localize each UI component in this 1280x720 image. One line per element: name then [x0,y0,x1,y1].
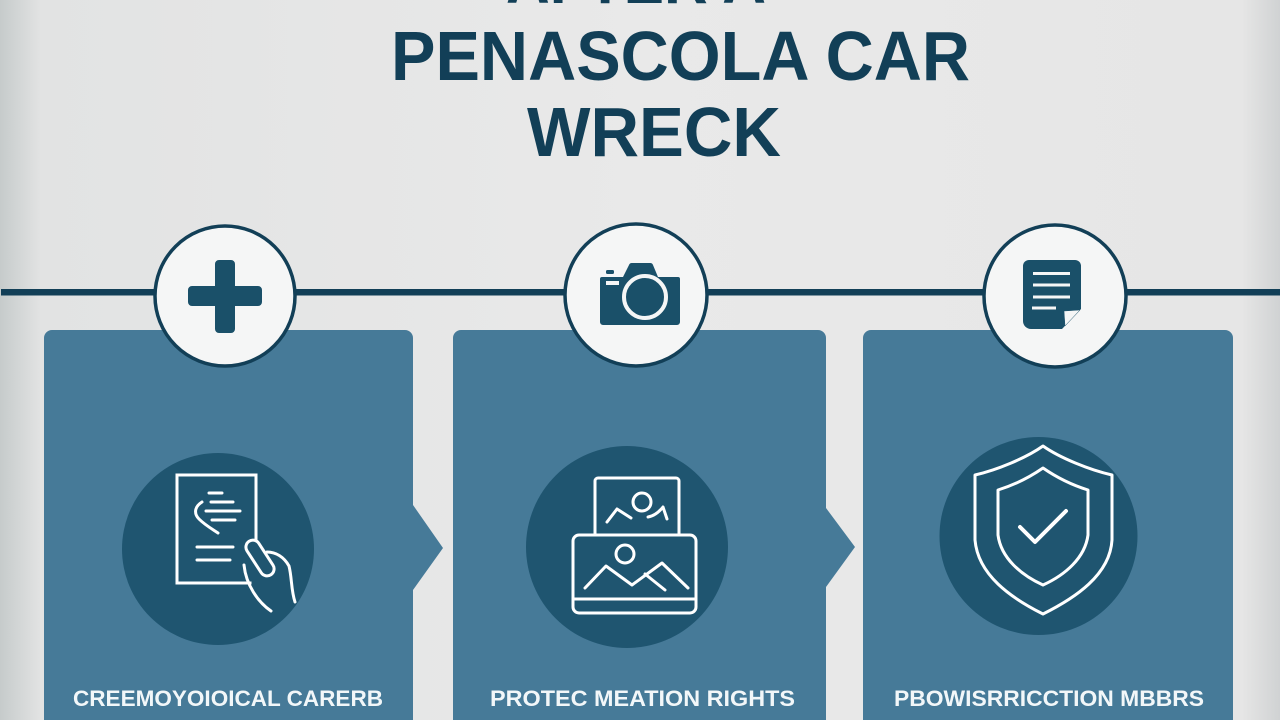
title [391,0,970,171]
panel: step 1 [44,330,443,720]
panel background with arrow [453,330,855,720]
icon: document in hand [122,453,314,645]
icon: medical cross badge [155,226,295,366]
panel label: PBOWISRRICCTION MBBRS [894,686,1204,711]
panel background [863,330,1233,720]
panel label: CREEMOYOIOICAL CARERB [73,686,383,711]
panel background with arrow [44,330,443,720]
title line: Penascola Car: PENASCOLA CAR [391,17,970,95]
panel: step 2 [453,330,855,720]
icon: photographs [526,446,728,648]
timeline connector [1,289,1280,296]
title line: Wreck: WRECK [527,93,781,171]
icon: camera badge [565,224,707,366]
panel: step 3 [863,330,1233,720]
panel label: PROTEC MEATION RIGHTS [490,686,795,711]
icon: document badge [984,225,1126,367]
icon: shield with check [940,437,1138,635]
